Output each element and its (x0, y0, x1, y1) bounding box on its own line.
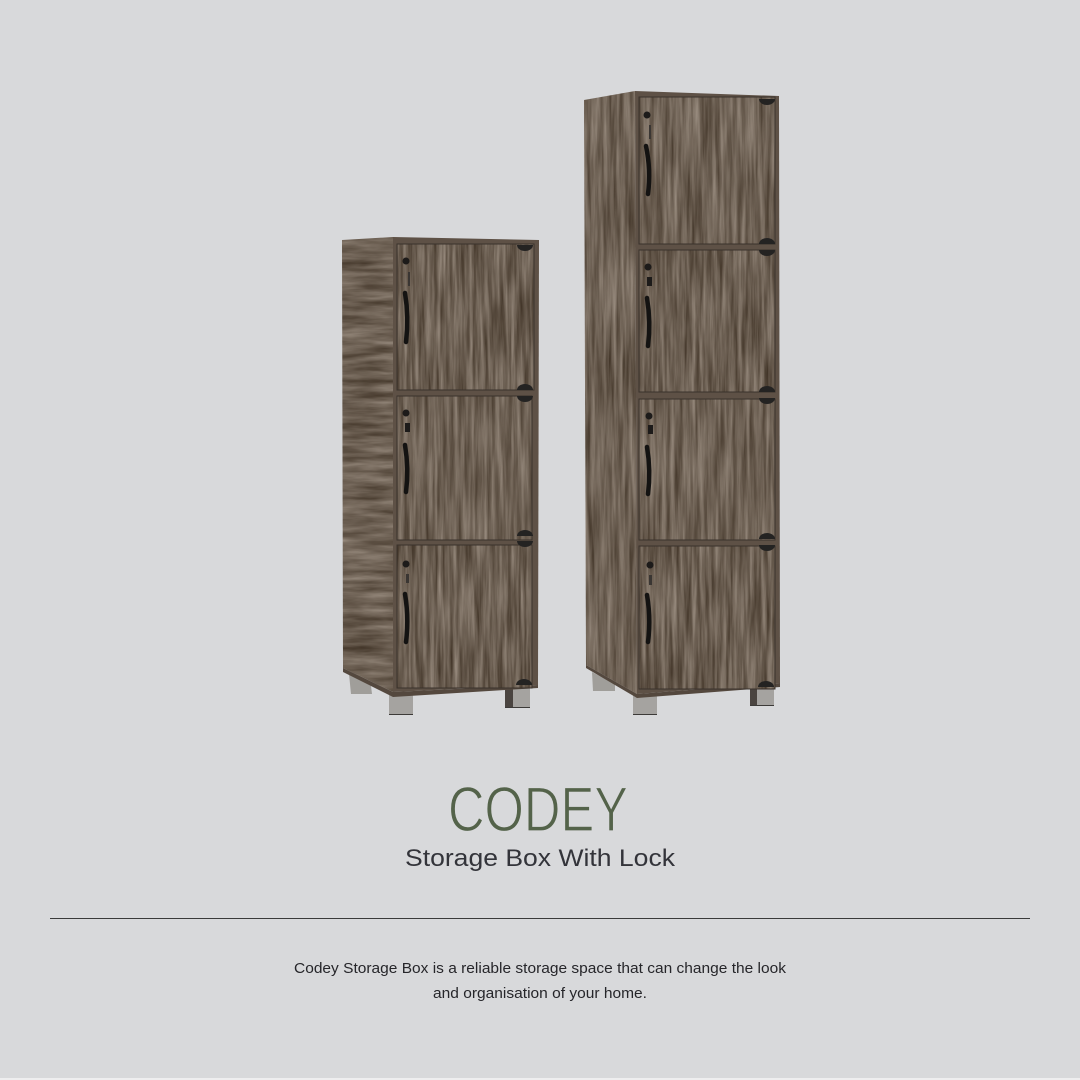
tall cabinet front frame (635, 91, 780, 694)
tall cabinet: four-door storage box (584, 91, 780, 715)
small cabinet door top (397, 244, 534, 390)
small cabinet front frame (393, 237, 539, 692)
small cabinet feet (349, 674, 530, 715)
title: CODEY (448, 775, 628, 845)
tall cabinet feet (592, 672, 774, 715)
small cabinet locks (402, 258, 410, 583)
small cabinet: three-door storage box (342, 237, 539, 715)
tall cabinet hinges (758, 99, 775, 687)
small cabinet door bottom (397, 545, 532, 688)
tall cabinet door 2 (639, 250, 775, 392)
description text: and organisation of your home. (433, 986, 647, 1002)
description text: Codey Storage Box is a reliable storage space that can change the look (294, 961, 787, 977)
tall cabinet door 1 (639, 97, 775, 244)
small cabinet handles (405, 293, 407, 642)
small cabinet side panel (342, 237, 394, 693)
tall cabinet door 3 (639, 399, 775, 540)
small cabinet door middle (397, 396, 532, 540)
description text (294, 961, 787, 1002)
small cabinet hinges (516, 245, 533, 685)
tall cabinet handles (646, 146, 649, 642)
subtitle: Storage Box With Lock (405, 845, 676, 872)
tall cabinet door 4 (639, 546, 775, 689)
tall cabinet locks (644, 112, 654, 585)
tall cabinet side panel (584, 91, 638, 695)
divider line (50, 918, 1030, 919)
